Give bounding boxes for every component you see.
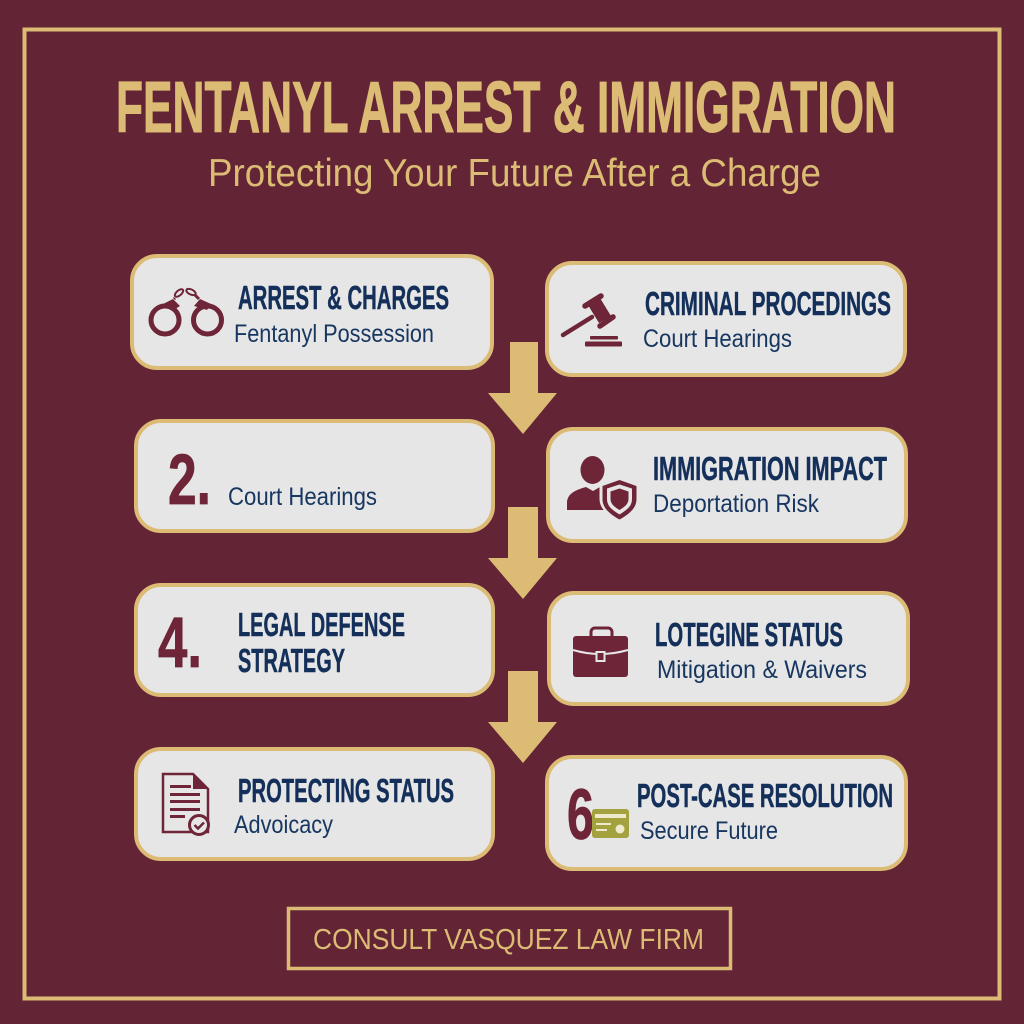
icon: handcuffs — [151, 288, 222, 334]
number 2: 2. — [168, 441, 211, 520]
call to action text: CONSULT VASQUEZ LAW FIRM — [313, 924, 704, 956]
arrow: step 3 to next row — [488, 671, 557, 763]
heading: lotegine status: LOTEGINE STATUS — [655, 616, 843, 653]
icon: green card — [592, 809, 629, 838]
panel: step 4 legal defense strategy — [136, 585, 493, 695]
call to action box — [288, 908, 730, 968]
panel: lotegine status — [549, 593, 908, 704]
icon: document with check — [163, 774, 208, 834]
text: court hearings: Court Hearings — [228, 483, 377, 511]
icon: gavel — [563, 296, 622, 346]
panel: immigration impact — [548, 429, 906, 541]
panel: arrest and charges — [132, 256, 492, 368]
subtitle: Protecting Your Future After a Charge — [208, 152, 821, 195]
panel: protecting status — [136, 749, 493, 859]
text: fentanyl possession: Fentanyl Possession — [234, 320, 434, 348]
arrow: step 2 to next row — [488, 507, 557, 599]
text: secure future: Secure Future — [640, 817, 778, 845]
icon: briefcase — [573, 628, 628, 677]
number 6: 6 — [567, 776, 594, 855]
panel: post-case resolution — [547, 757, 906, 869]
heading: immigration impact: IMMIGRATION IMPACT — [653, 450, 887, 487]
text: court hearings: Court Hearings — [643, 325, 792, 353]
heading: legal defense strategy: LEGAL DEFENSE — [238, 606, 405, 643]
panel: step 2 court hearings — [136, 421, 493, 531]
text: advoicacy: Advoicacy — [234, 811, 333, 839]
arrow: step 1 to next row — [488, 342, 557, 434]
text: deportation risk: Deportation Risk — [653, 490, 819, 518]
panel: criminal proceedings — [547, 263, 905, 375]
number 4: 4. — [158, 604, 202, 683]
heading: second line: STRATEGY — [238, 642, 345, 679]
text: mitigation and waivers: Mitigation & Waivers — [657, 656, 867, 684]
icon: person with shield — [567, 456, 640, 522]
heading: protecting status: PROTECTING STATUS — [238, 772, 454, 809]
heading: arrest and charges: ARREST & CHARGES — [238, 279, 449, 316]
